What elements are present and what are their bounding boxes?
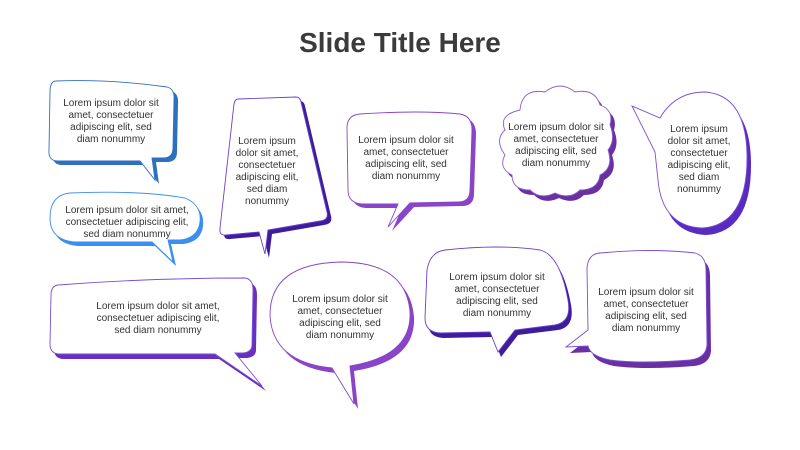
bubble 8 circle: amet, consectetuer xyxy=(297,306,383,317)
bubble 3: dolor sit amet, xyxy=(236,148,298,159)
bubble 1: amet, consectetuer xyxy=(68,110,154,121)
bubble 8 circle: adipiscing elit, sed xyxy=(299,318,381,329)
bubble 6 oval: Lorem ipsum xyxy=(670,124,728,135)
bubble 9: Lorem ipsum dolor sit xyxy=(449,272,545,283)
bubble 4: adipiscing elit, sed xyxy=(365,159,447,170)
bubble 2: consectetuer adipiscing elit, xyxy=(66,217,188,228)
bubble 5 cloud: amet, consectetuer xyxy=(513,134,599,145)
bubble 1: Lorem ipsum dolor sit xyxy=(63,98,159,109)
bubble 1 xyxy=(49,81,178,184)
bubble 6 oval: sed diam xyxy=(679,172,719,183)
title: Slide Title Here xyxy=(299,27,501,58)
bubble 1: diam nonummy xyxy=(77,134,145,145)
bubble 10: adipiscing elit, sed xyxy=(605,311,687,322)
bubble 7: consectetuer adipiscing elit, xyxy=(97,313,219,324)
bubble 3: Lorem ipsum xyxy=(238,136,296,147)
bubble 5 cloud: Lorem ipsum dolor sit xyxy=(508,122,604,133)
bubble 8 circle: diam nonummy xyxy=(306,330,374,341)
bubble 1: adipiscing elit, sed xyxy=(70,122,152,133)
bubble 10: amet, consectetuer xyxy=(603,299,689,310)
bubble 3 xyxy=(220,97,331,258)
bubble 6 oval xyxy=(632,92,751,235)
bubble 4: amet, consectetuer xyxy=(363,147,449,158)
bubble 7 xyxy=(50,278,266,391)
bubble 3: nonummy xyxy=(245,196,289,207)
bubble 9: adipiscing elit, sed xyxy=(456,296,538,307)
bubble 6 oval: dolor sit amet, xyxy=(668,136,730,147)
bubble 6 oval: nonummy xyxy=(677,184,721,195)
bubble 9: amet, consectetuer xyxy=(454,284,540,295)
bubble 8 circle xyxy=(270,262,414,409)
bubble 6 oval: adipiscing elit, xyxy=(668,160,730,171)
bubble 3: consectetuer xyxy=(238,160,296,171)
bubble 2: Lorem ipsum dolor sit amet, xyxy=(65,205,189,216)
bubble 2: sed diam nonummy xyxy=(83,229,171,240)
bubble 8 circle: Lorem ipsum dolor sit xyxy=(292,294,388,305)
bubble 6 oval: consectetuer xyxy=(670,148,728,159)
bubble 10 xyxy=(566,250,711,368)
bubble 4: Lorem ipsum dolor sit xyxy=(358,135,454,146)
bubble 9: diam nonummy xyxy=(463,308,531,319)
bubble 10: Lorem ipsum dolor sit xyxy=(598,287,694,298)
bubble 10: diam nonummy xyxy=(612,323,680,334)
bubble 4 xyxy=(347,112,476,231)
bubble 3: adipiscing elit, xyxy=(236,172,298,183)
bubble 5 cloud xyxy=(500,86,617,201)
bubble 5 cloud: adipiscing elit, sed xyxy=(515,146,597,157)
bubble 2 xyxy=(50,192,203,266)
bubble 7: Lorem ipsum dolor sit amet, xyxy=(96,301,220,312)
bubble 4: diam nonummy xyxy=(372,171,440,182)
bubble 5 cloud: diam nonummy xyxy=(522,158,590,169)
bubble 3: sed diam xyxy=(247,184,287,195)
bubble 9 xyxy=(425,247,572,357)
bubble 7: sed diam nonummy xyxy=(114,325,202,336)
